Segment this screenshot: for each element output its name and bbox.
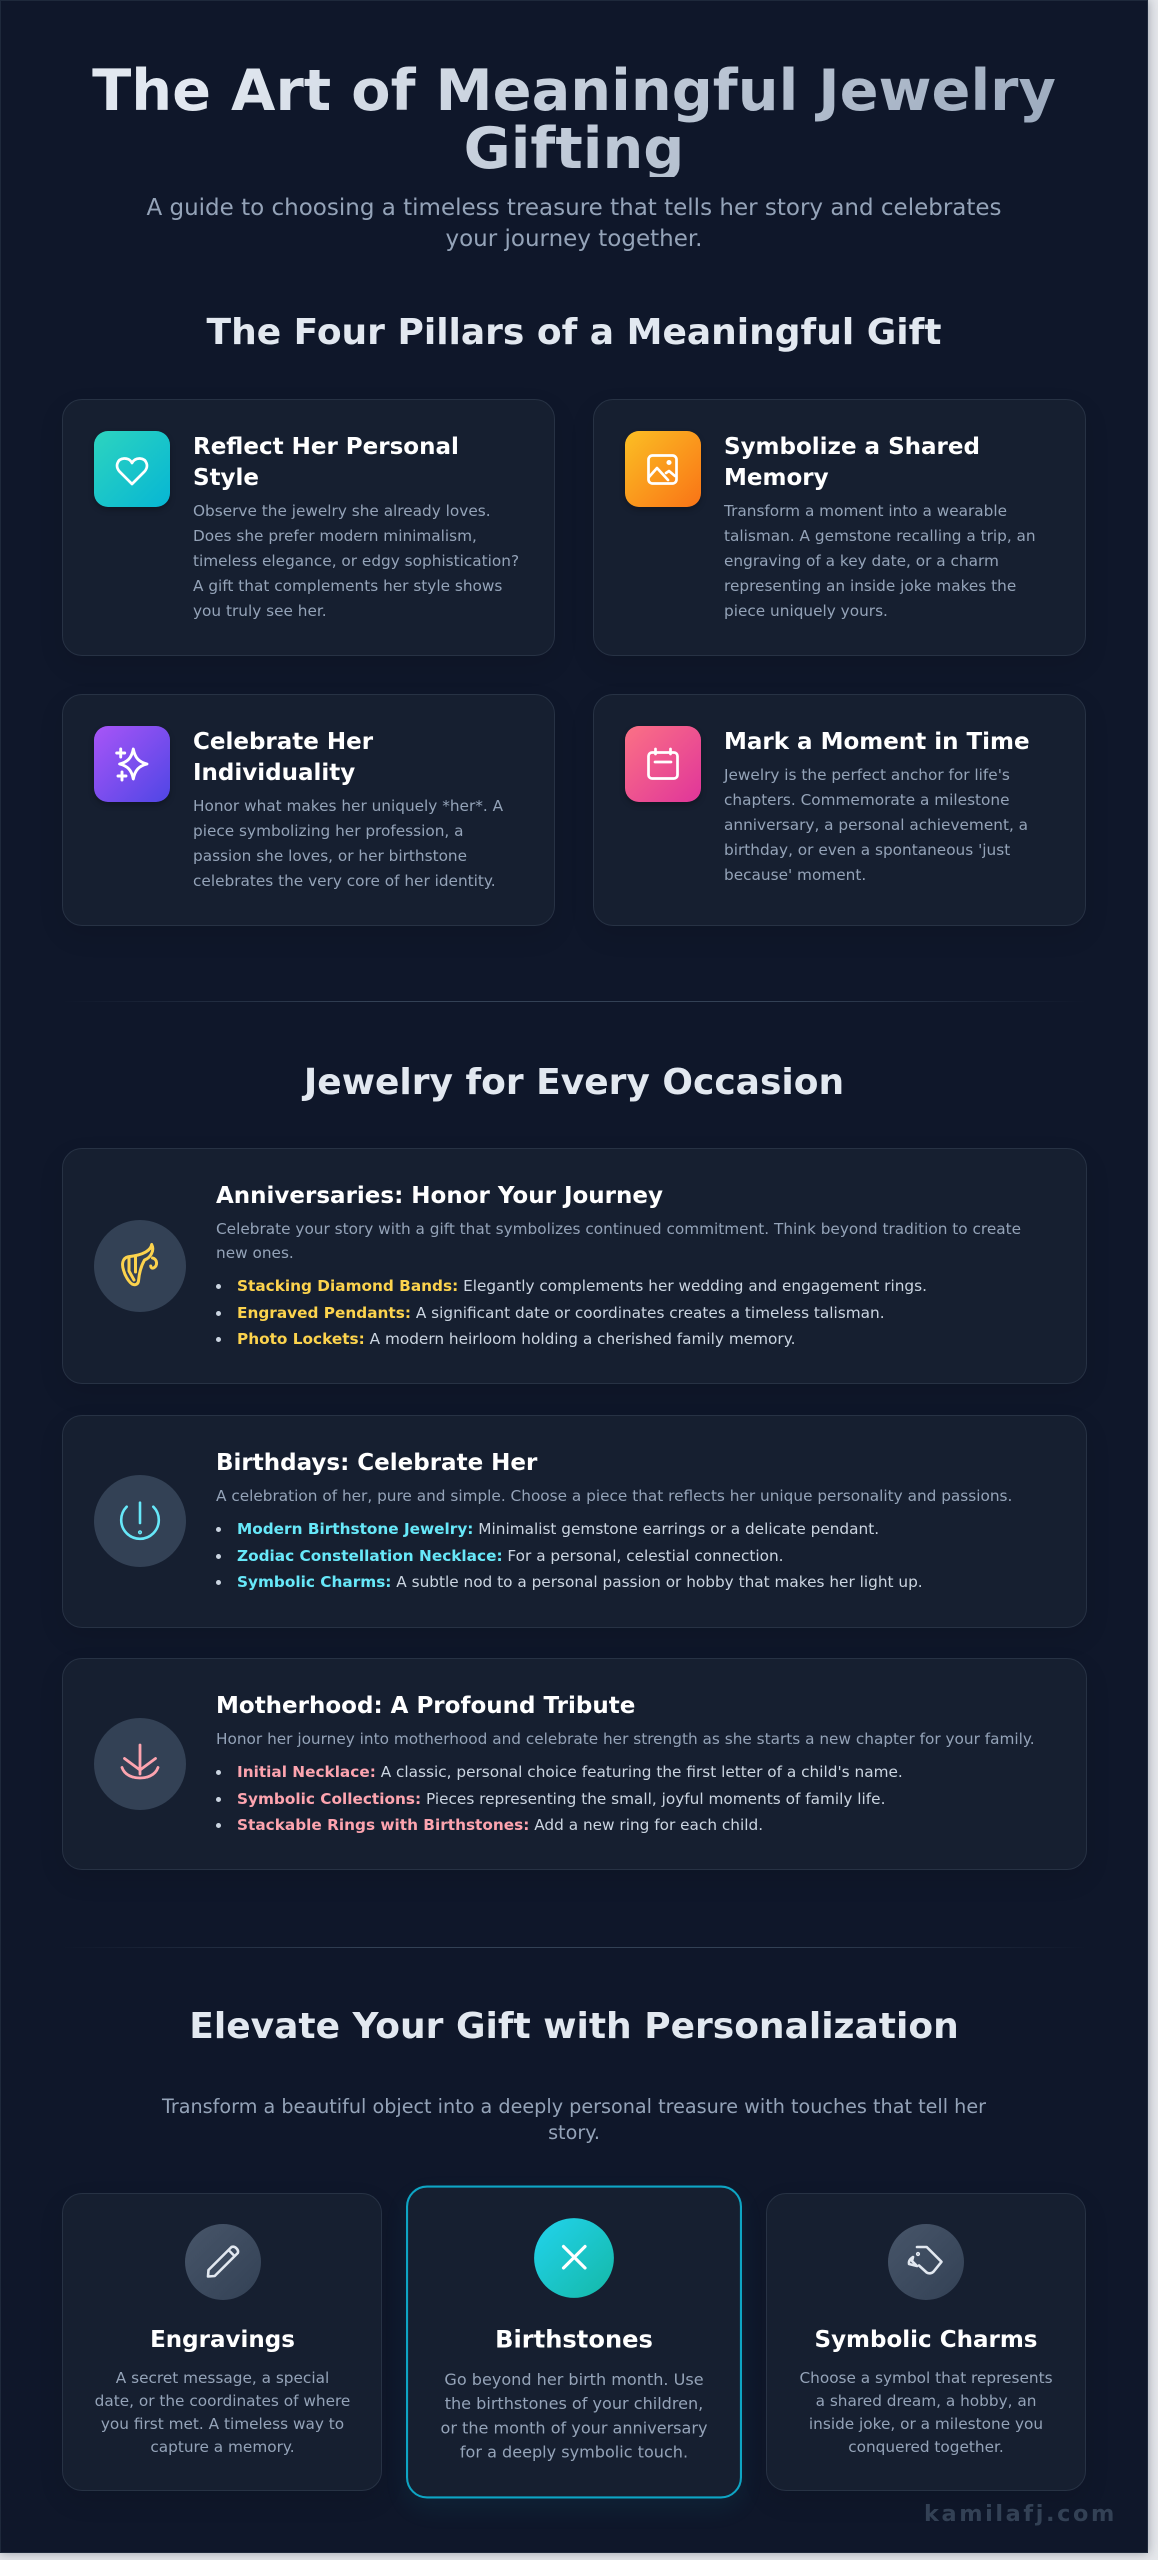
text: symbolic charms: Choose a symbol that represents a shared dream, a hobby, an inside joke, or a milestone you conquered together. <box>799 2369 1053 2456</box>
title: The Art of Meaningful Jewelry Gifting <box>92 57 1056 182</box>
text: mark a moment in time: Mark a Moment in Time <box>724 729 1030 755</box>
text: motherhood: Motherhood: A Profound Tribute <box>216 1693 635 1719</box>
panel: birthdays <box>62 1415 1087 1628</box>
heading: four pillars: The Four Pillars of a Meaningful Gift <box>207 312 941 353</box>
heading: jewelry for every occasion: Jewelry for Every Occasion <box>304 1062 844 1103</box>
panel: celebrate her individuality <box>62 694 555 926</box>
panel: motherhood <box>62 1658 1087 1870</box>
panel: anniversaries <box>62 1148 1087 1384</box>
icon: heart <box>94 431 170 507</box>
text: engravings: you first met. A timeless way to <box>101 2415 344 2433</box>
text: symbolize a shared memory: Symbolize a Shared Memory <box>724 434 980 491</box>
panel: reflect her personal style <box>62 399 555 656</box>
text: anniversaries <box>216 1183 1021 1348</box>
text: engravings <box>95 2326 350 2456</box>
panel: symbolize a shared memory <box>593 399 1086 656</box>
text: motherhood: Initial Necklace: A classic, personal choice featuring the first letter of a child's name. <box>237 1763 903 1781</box>
text: reflect her personal style <box>193 434 519 620</box>
text: birthdays: Zodiac Constellation Necklace: For a personal, celestial connection. <box>237 1547 784 1565</box>
text: anniversaries: Celebrate your story with a gift that symbolizes continued commitment. Think beyond tradition to create new ones. <box>216 1220 1021 1262</box>
icon: sparkles <box>94 726 170 802</box>
panel: symbolic charms <box>766 2193 1086 2491</box>
panel: birthstones (featured) <box>406 2186 742 2498</box>
text: birthdays: Birthdays: Celebrate Her <box>216 1450 537 1476</box>
watermark: kamilafj.com <box>924 2501 1117 2527</box>
heading: elevate with personalization: Elevate Your Gift with Personalization <box>189 2006 959 2047</box>
text: birthdays: A celebration of her, pure and simple. Choose a piece that reflects her unique personality and passions. <box>216 1487 1012 1505</box>
icon: pencil <box>184 2224 260 2300</box>
text: celebrate her individuality: Celebrate Her Individuality <box>193 729 373 786</box>
text: birthdays: Modern Birthstone Jewelry: Minimalist gemstone earrings or a delicate pendant. <box>237 1520 879 1538</box>
text: motherhood: Symbolic Collections: Pieces representing the small, joyful moments of family life. <box>237 1790 885 1808</box>
text: anniversaries: Engraved Pendants: A significant date or coordinates creates a timeless talisman. <box>237 1304 885 1322</box>
icon: image <box>625 431 701 507</box>
text: motherhood <box>216 1693 1035 1834</box>
text: birthstones: Go beyond her birth month. Use the birthstones of your children, or the month of your anniversary for a deeply symbolic touch. <box>440 2370 708 2461</box>
text: celebrate her individuality: Honor what makes her uniquely *her*. A piece symbolizing her profession, a passion she loves, or her birthstone celebrates the very core of her identity. <box>193 797 503 890</box>
subtitle: A guide to choosing a timeless treasure that tells her story and celebrates your journey together. <box>146 195 1002 252</box>
text: birthstones: Birthstones <box>495 2326 653 2353</box>
icon: lotus <box>94 1718 186 1810</box>
text: birthstones <box>440 2326 708 2461</box>
text: anniversaries: Stacking Diamond Bands: Elegantly complements her wedding and engagement rings. <box>237 1277 927 1295</box>
text: reflect her personal style: Reflect Her Personal Style <box>193 434 459 491</box>
text: engravings: A secret message, a special <box>116 2369 329 2387</box>
text: symbolize a shared memory: Transform a moment into a wearable talisman. A gemstone recalling a trip, an engraving of a key date, or a charm representing an inside joke makes the piece uniquely yours. <box>724 502 1036 620</box>
text: birthdays: Symbolic Charms: A subtle nod to a personal passion or hobby that makes her light up. <box>237 1573 923 1591</box>
text: anniversaries: Photo Lockets: A modern heirloom holding a cherished family memory. <box>237 1330 795 1348</box>
icon: tag charm <box>888 2224 964 2300</box>
text: motherhood: Stackable Rings with Birthstones: Add a new ring for each child. <box>237 1816 763 1834</box>
icon: calendar <box>625 726 701 802</box>
icon: power symbol <box>94 1475 186 1567</box>
text: symbolic charms: Symbolic Charms <box>814 2326 1037 2352</box>
icon: cross <box>534 2218 614 2298</box>
text: reflect her personal style: Observe the jewelry she already loves. Does she prefer modern minimalism, timeless elegance, or edgy sophistication? A gift that complements her style shows you truly see her. <box>193 502 519 620</box>
panel: mark a moment in time <box>593 694 1086 926</box>
text: birthdays <box>216 1450 1012 1591</box>
panel: engravings <box>62 2193 382 2491</box>
text: symbolic charms <box>799 2326 1053 2456</box>
text: celebrate her individuality <box>193 729 503 890</box>
text: mark a moment in time: Jewelry is the perfect anchor for life's chapters. Commemorate a milestone anniversary, a personal achievement, a birthday, or even a spontaneous 'just because' moment. <box>724 766 1028 884</box>
text: motherhood: Honor her journey into motherhood and celebrate her strength as she starts a new chapter for your family. <box>216 1730 1035 1748</box>
text: engravings: capture a memory. <box>150 2438 295 2456</box>
text: engravings: Engravings <box>150 2326 295 2352</box>
intro text: personalization: Transform a beautiful object into a deeply personal treasure with touches that tell her story. <box>162 2095 986 2144</box>
text: symbolize a shared memory <box>724 434 1036 620</box>
text: engravings: date, or the coordinates of where <box>95 2392 350 2410</box>
icon: saddle ornament <box>94 1220 186 1312</box>
text: anniversaries: Anniversaries: Honor Your Journey <box>216 1183 663 1209</box>
